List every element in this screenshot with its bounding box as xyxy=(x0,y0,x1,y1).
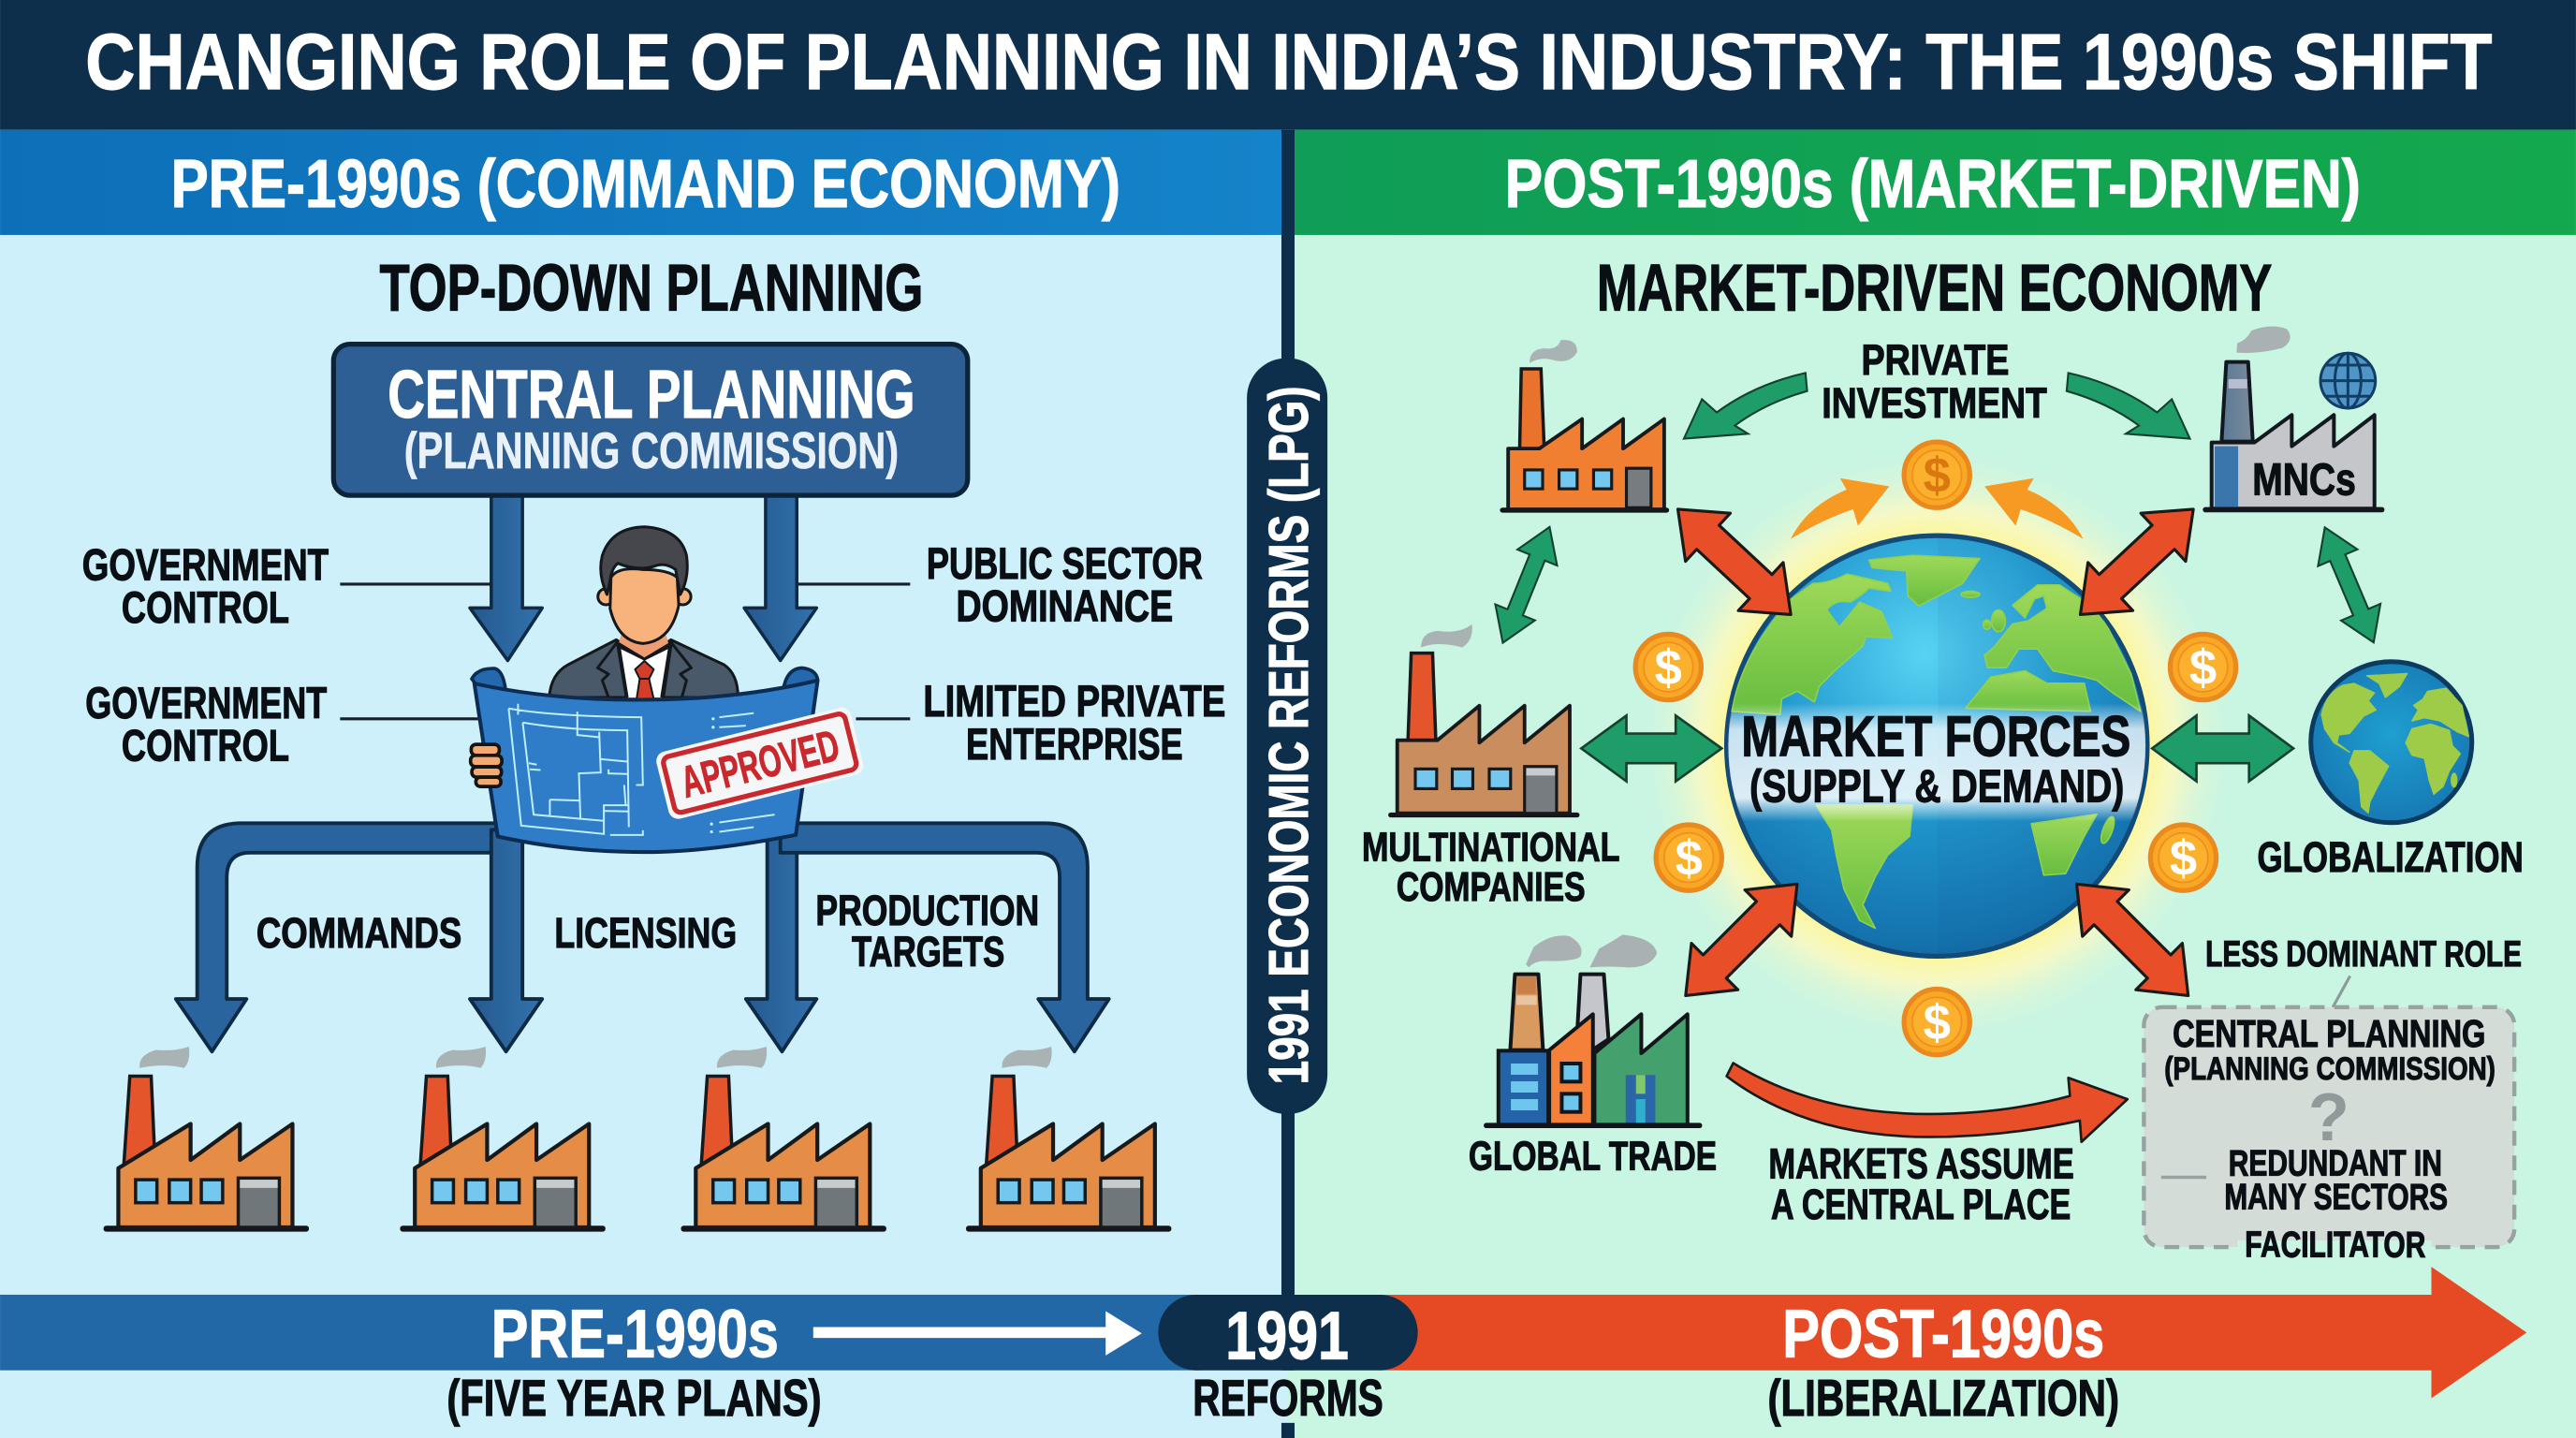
box: central planning reduced role: FACILITATOR xyxy=(2245,1225,2425,1266)
label: limited private enterprise: ENTERPRISE xyxy=(966,720,1183,770)
icon: coin lower left: $ xyxy=(1676,831,1703,887)
label: post-1990s: POST-1990s xyxy=(1782,1298,2104,1372)
label: pre-1990s: PRE-1990s xyxy=(491,1298,779,1372)
icon: coin bottom xyxy=(1904,990,1969,1055)
label: public sector dominance: PUBLIC SECTOR xyxy=(927,539,1203,589)
box: central planning reduced role: MANY SECTORS xyxy=(2224,1178,2448,1218)
label: limited private enterprise: LIMITED PRIVATE xyxy=(923,677,1225,726)
icon: coin lower left xyxy=(1656,825,1721,890)
box: central planning reduced role: (PLANNING COMMISSION) xyxy=(2164,1051,2496,1087)
icon: coin upper left xyxy=(1635,634,1701,700)
label: government control upper: CONTROL xyxy=(122,583,289,633)
blueprint sheet xyxy=(472,668,818,852)
icon: global trade factories xyxy=(1484,934,1702,1128)
panel: post-1990s background xyxy=(1288,130,2576,1438)
label: markets assume a central place: A CENTRAL PLACE xyxy=(1771,1181,2071,1228)
label: government control upper xyxy=(82,541,491,633)
box: central planning: (PLANNING COMMISSION) xyxy=(404,422,899,479)
label: liberalization: (LIBERALIZATION) xyxy=(1767,1370,2119,1427)
box: central planning reduced role xyxy=(2144,1007,2514,1266)
arrows: central planning down to planner xyxy=(470,493,816,661)
label: five year plans: (FIVE YEAR PLANS) xyxy=(446,1370,822,1427)
title banner xyxy=(0,0,2576,130)
arrow: green double, MNCs and globalization xyxy=(2305,519,2393,651)
vertical band: 1991 economic reforms: 1991 ECONOMIC REFORMS (LPG) xyxy=(1257,386,1320,1084)
person xyxy=(549,527,738,699)
icon: domestic factory xyxy=(1500,340,1669,513)
box: central planning reduced role: CENTRAL PLANNING xyxy=(2173,1012,2485,1055)
arrows: orange arrows to top coin xyxy=(1791,478,2083,539)
label: production targets xyxy=(815,887,1039,976)
timeline: post-1990s arrow xyxy=(1380,1267,2526,1399)
timeline: 1991 marker: 1991 xyxy=(1225,1299,1349,1373)
label: markets assume a central place: MARKETS ASSUME xyxy=(1768,1139,2074,1187)
label: global trade: GLOBAL TRADE xyxy=(1469,1134,1717,1180)
label: public sector dominance xyxy=(798,539,1203,631)
arrow: green double, factories vertical left xyxy=(1483,519,1570,651)
illustration: planner holding blueprint xyxy=(471,527,866,852)
illustration: globe glow xyxy=(1633,442,2241,1049)
illustration: central globe xyxy=(1725,536,2149,956)
label: supply and demand: (SUPPLY & DEMAND) xyxy=(1749,761,2124,812)
icon: coin top: $ xyxy=(1924,448,1951,504)
arrow: green double, globe and globalization xyxy=(2152,715,2293,782)
label: private investment: PRIVATE xyxy=(1862,336,2009,384)
heading: pre-1990s banner: PRE-1990s (COMMAND ECONOMY) xyxy=(171,147,1120,222)
icon: coin lower right: $ xyxy=(2170,831,2197,887)
box: central planning xyxy=(333,345,968,495)
label: private investment: INVESTMENT xyxy=(1822,379,2047,427)
icon: factory 1 xyxy=(104,1047,309,1232)
icon: coin lower right xyxy=(2150,825,2217,890)
label: reforms: REFORMS xyxy=(1193,1370,1383,1427)
box: central planning reduced role: REDUNDANT IN xyxy=(2229,1144,2442,1184)
icon: question mark: ? xyxy=(2308,1080,2349,1155)
label: government control lower xyxy=(85,679,478,771)
heading: post-1990s banner xyxy=(1295,130,2576,235)
heading: market-driven economy: MARKET-DRIVEN ECONOMY xyxy=(1597,251,2272,325)
icon: multinational companies factory xyxy=(1388,624,1580,817)
icon: factory 4 xyxy=(966,1047,1171,1232)
stamp: approved: APPROVED xyxy=(676,721,844,808)
label: public sector dominance: DOMINANCE xyxy=(956,581,1173,631)
vertical band: 1991 economic reforms xyxy=(1247,359,1327,1114)
box: central planning: CENTRAL PLANNING xyxy=(388,358,915,433)
label: market forces: MARKET FORCES xyxy=(1741,704,2130,769)
label: government control lower: GOVERNMENT xyxy=(85,679,327,728)
label: private investment xyxy=(1822,336,2047,427)
icon: coin bottom: $ xyxy=(1924,995,1951,1050)
arrow: red double, global trade and globe xyxy=(1662,860,1821,1019)
arrow: investment to domestic factory xyxy=(1684,373,1808,439)
label: government control upper: GOVERNMENT xyxy=(82,541,329,591)
hand xyxy=(471,744,502,786)
label: government control lower: CONTROL xyxy=(122,722,289,771)
label: multinational companies xyxy=(1362,825,1620,910)
icon: MNCs factory: MNCs xyxy=(2252,454,2356,505)
icon: coin upper right xyxy=(2170,634,2236,700)
timeline xyxy=(0,1267,2526,1427)
icon: factory 2 xyxy=(400,1047,606,1232)
heading: post-1990s banner: POST-1990s (MARKET-DRIVEN) xyxy=(1505,147,2361,222)
icon: factory 3 xyxy=(681,1047,886,1232)
arrow: markets move to central planning xyxy=(1727,1064,2128,1142)
stamp: approved xyxy=(654,706,866,821)
arrow: red double, MNCs and globe xyxy=(2058,485,2216,638)
label: multinational companies: COMPANIES xyxy=(1397,864,1586,910)
panel: top-down planning xyxy=(82,251,1225,1232)
timeline: 1991 marker xyxy=(1158,1295,1418,1373)
arrow: white timeline arrow xyxy=(813,1312,1142,1356)
arrow: green double, multinational companies and globe xyxy=(1581,715,1721,782)
icon: coin upper left: $ xyxy=(1655,640,1682,696)
label: limited private enterprise xyxy=(856,677,1225,770)
arrow: red double, domestic factory and globe xyxy=(1656,485,1813,638)
timeline: pre-1990s segment xyxy=(0,1295,1199,1371)
arrow: investment to MNCs xyxy=(2067,373,2190,439)
icon: coin top xyxy=(1904,442,1969,507)
label: commands: COMMANDS xyxy=(256,909,461,957)
arrow: red double, central planning and globe xyxy=(2054,860,2211,1019)
icon: MNCs factory xyxy=(2203,327,2384,512)
heading: pre-1990s banner xyxy=(0,130,1281,235)
panel: pre-1990s background xyxy=(0,130,1288,1438)
label: production targets: TARGETS xyxy=(852,928,1004,976)
label: production targets: PRODUCTION xyxy=(815,887,1039,934)
illustration: small globe xyxy=(2311,662,2472,823)
arrows: branches from blueprint to factories xyxy=(176,823,1109,1051)
heading: top-down planning: TOP-DOWN PLANNING xyxy=(379,251,923,325)
panel: market-driven economy xyxy=(1362,251,2524,1266)
label: less dominant role xyxy=(2205,934,2522,1007)
label: licensing: LICENSING xyxy=(554,909,737,957)
label: multinational companies: MULTINATIONAL xyxy=(1362,825,1620,871)
label: markets assume a central place xyxy=(1768,1139,2074,1228)
icon: coin upper right: $ xyxy=(2189,640,2217,696)
